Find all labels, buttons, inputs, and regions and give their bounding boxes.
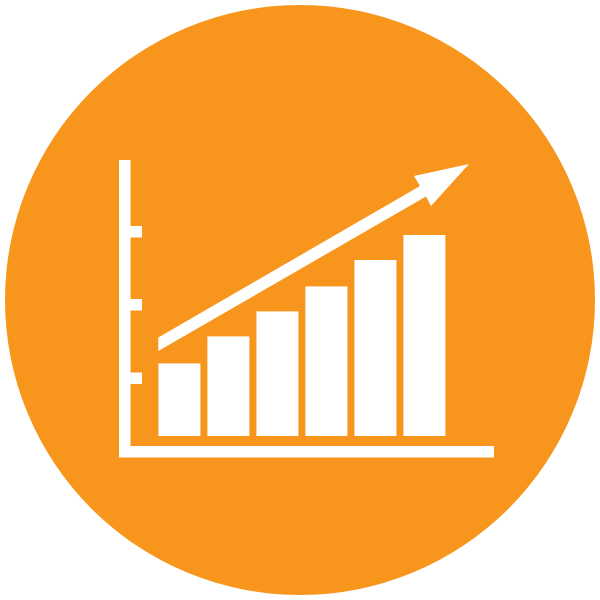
chart axes with tick marks [119, 160, 494, 458]
rising arrow [158, 164, 469, 351]
bar chart [158, 235, 445, 436]
